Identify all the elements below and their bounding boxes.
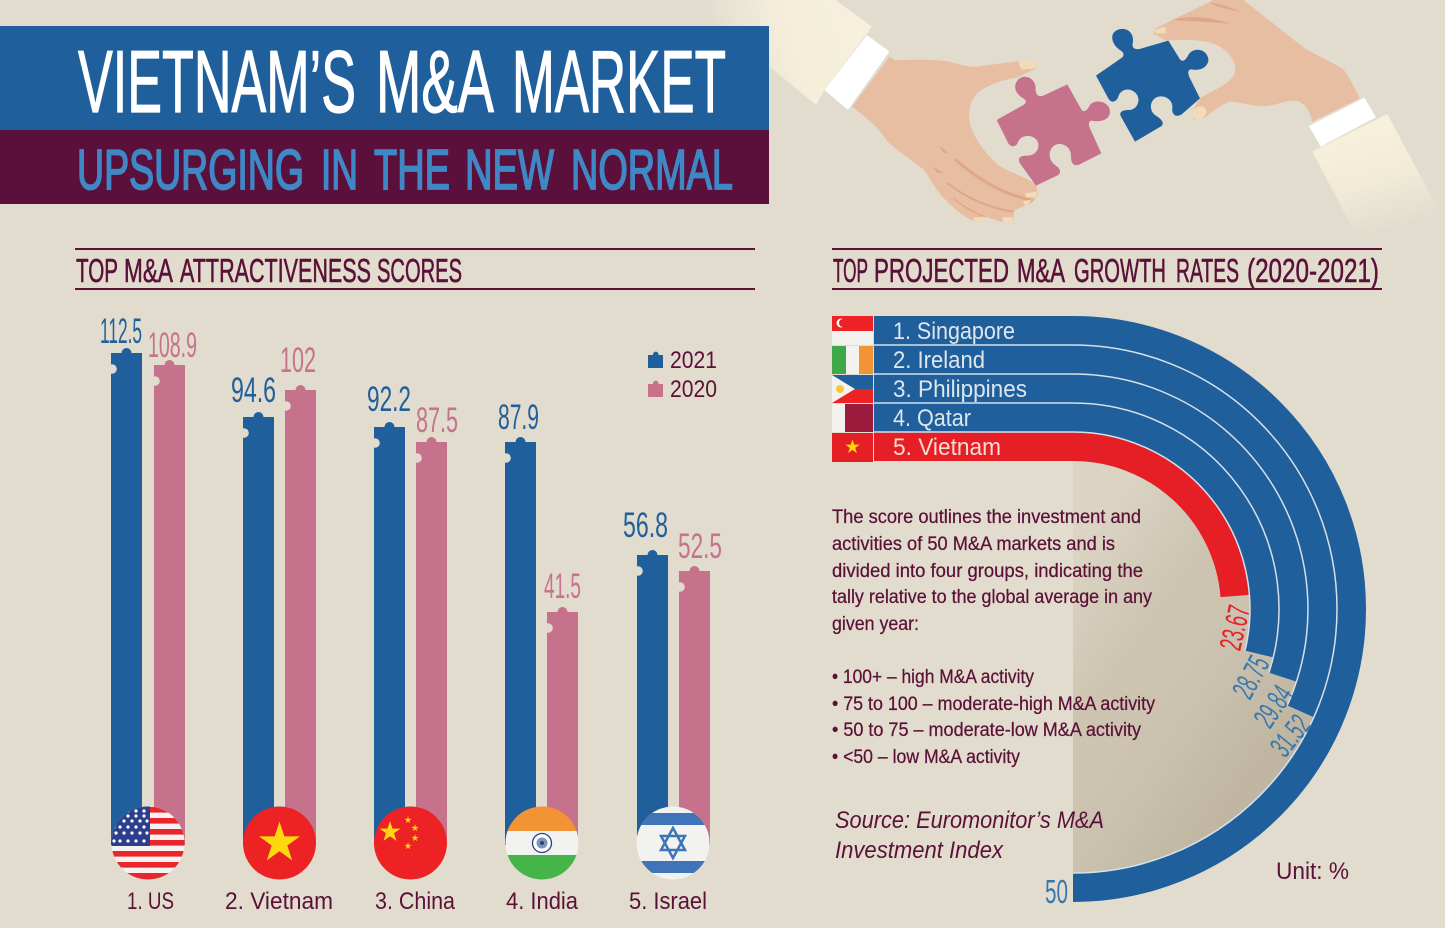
bars: India: 41.5 bbox=[544, 567, 581, 606]
ring: Qatar 28.75 bbox=[874, 418, 1264, 654]
legend bbox=[648, 347, 717, 403]
ring values: 23.67 bbox=[1213, 602, 1257, 654]
bars: India bbox=[498, 398, 581, 845]
flag: Qatar bbox=[832, 404, 873, 432]
inner shading bbox=[1073, 345, 1337, 873]
right hand bbox=[1153, 0, 1360, 122]
bars: US: 112.5 bbox=[100, 312, 142, 351]
explanatory text: activities of 50 M&A markets and is bbox=[832, 534, 1115, 555]
small flags bbox=[832, 316, 873, 462]
country labels: 3. China bbox=[375, 888, 456, 915]
radial chart: projected growth rates bbox=[874, 318, 1352, 910]
flag: China bbox=[374, 806, 447, 880]
flag: Israel bbox=[636, 806, 711, 881]
left hand finger creases bbox=[948, 160, 1032, 217]
subtitle: NEW bbox=[465, 138, 554, 202]
bars: China: 87.5 bbox=[416, 401, 458, 440]
flag: India bbox=[505, 806, 580, 881]
blue puzzle piece bbox=[1096, 29, 1208, 142]
heading: attractiveness scores: M&A bbox=[124, 253, 173, 290]
left hand bbox=[852, 57, 1038, 222]
explanatory text: The score outlines the investment and bbox=[832, 507, 1141, 528]
unit note: Unit: % bbox=[1276, 858, 1349, 885]
left sleeve bbox=[712, 0, 872, 105]
ring labels: 2. Ireland bbox=[893, 347, 985, 374]
country labels: 2. Vietnam bbox=[225, 888, 333, 915]
ring values: 31.52 bbox=[1263, 708, 1318, 763]
country labels bbox=[127, 888, 707, 915]
bars: US bbox=[100, 312, 197, 845]
subtitle: NORMAL bbox=[571, 138, 733, 202]
left hand small creases bbox=[933, 145, 949, 173]
subtitle: UPSURGING bbox=[77, 138, 304, 202]
bars: Israel: 56.8 bbox=[623, 506, 668, 545]
heading: projected growth rates: RATES bbox=[1176, 253, 1239, 290]
ring: Philippines 29.84 bbox=[874, 388, 1293, 677]
explanatory text: given year: bbox=[832, 614, 919, 635]
bars: Israel bbox=[623, 506, 722, 845]
bars: China: 92.2 bbox=[367, 380, 411, 419]
ring: Vietnam 23.67 bbox=[874, 446, 1235, 596]
ring separators bbox=[874, 345, 1337, 873]
explanatory text: divided into four groups, indicating the bbox=[832, 561, 1143, 582]
bars: China bbox=[367, 380, 458, 845]
heading: projected growth rates: TOP bbox=[833, 253, 868, 290]
ring values bbox=[1045, 602, 1318, 910]
heading: attractiveness scores: ATTRACTIVENESS bbox=[180, 253, 371, 290]
subtitle: THE bbox=[374, 138, 450, 202]
flag: Ireland bbox=[832, 346, 873, 374]
heading: projected growth rates: PROJECTED bbox=[874, 253, 1009, 290]
explanatory text: tally relative to the global average in any bbox=[832, 587, 1152, 608]
flag: Singapore bbox=[832, 316, 873, 345]
bars: Vietnam: 94.6 bbox=[231, 371, 276, 410]
ring labels bbox=[893, 318, 1027, 461]
heading: projected growth rates: (2020-2021) bbox=[1247, 253, 1379, 290]
illustration: hands joining puzzle pieces bbox=[712, 0, 1445, 240]
heading: attractiveness scores: SCORES bbox=[377, 253, 462, 290]
legend 2020: 2020 bbox=[670, 376, 717, 403]
left cuff bbox=[825, 35, 889, 110]
ring: Ireland 31.52 bbox=[874, 360, 1322, 711]
explanatory text: • 100+ – high M&A activity bbox=[832, 667, 1034, 688]
banner maroon band bbox=[0, 130, 769, 204]
flag: Vietnam bbox=[243, 806, 316, 880]
explanatory text bbox=[832, 507, 1155, 768]
title: VIETNAM’S bbox=[78, 32, 356, 131]
heading: projected growth rates bbox=[832, 248, 1382, 290]
bars: Israel: 52.5 bbox=[678, 527, 722, 566]
ring labels: 3. Philippines bbox=[893, 376, 1027, 403]
flag: US bbox=[111, 806, 186, 880]
ring labels: 5. Vietnam bbox=[893, 434, 1001, 461]
country labels: 5. Israel bbox=[629, 888, 707, 915]
ring: Singapore 50 bbox=[874, 330, 1352, 888]
right cuff bbox=[1309, 98, 1376, 147]
source note bbox=[835, 807, 1104, 864]
title: M&A bbox=[376, 32, 494, 131]
country labels: 4. India bbox=[506, 888, 579, 915]
pink puzzle piece bbox=[997, 77, 1110, 186]
country labels: 1. US bbox=[127, 888, 174, 915]
title: MARKET bbox=[512, 32, 726, 131]
bars: India: 87.9 bbox=[498, 398, 539, 437]
source note: Investment Index bbox=[835, 837, 1004, 864]
legend 2021: 2021 bbox=[670, 347, 717, 374]
explanatory text: • 50 to 75 – moderate-low M&A activity bbox=[832, 720, 1141, 741]
fingernails bbox=[973, 27, 1208, 223]
explanatory text: • 75 to 100 – moderate-high M&A activity bbox=[832, 694, 1155, 715]
ring values: 29.84 bbox=[1247, 679, 1300, 734]
source note: Source: Euromonitor’s M&A bbox=[835, 807, 1104, 834]
explanatory text: • <50 – low M&A activity bbox=[832, 747, 1020, 768]
bars: US: 108.9 bbox=[148, 326, 197, 365]
ring labels: 1. Singapore bbox=[893, 318, 1015, 345]
ring values: 50 bbox=[1045, 873, 1068, 910]
right sleeve bbox=[1312, 114, 1445, 240]
bars: Vietnam: 102 bbox=[280, 341, 316, 380]
bars: Vietnam bbox=[231, 341, 316, 845]
ring labels: 4. Qatar bbox=[893, 405, 971, 432]
flag: Philippines bbox=[832, 375, 873, 403]
subtitle: IN bbox=[321, 138, 358, 202]
heading: attractiveness scores: TOP bbox=[76, 253, 118, 290]
ring values: 28.75 bbox=[1225, 650, 1276, 704]
banner blue band bbox=[0, 26, 769, 130]
right hand creases bbox=[1172, 3, 1239, 24]
flag: Vietnam small bbox=[832, 433, 873, 462]
bar chart: attractiveness scores bbox=[100, 312, 722, 845]
title banner bbox=[0, 26, 769, 204]
heading: attractiveness scores bbox=[75, 248, 755, 290]
heading: projected growth rates: GROWTH bbox=[1074, 253, 1166, 290]
subtitle bbox=[77, 138, 733, 202]
heading: projected growth rates: M&A bbox=[1017, 253, 1065, 290]
